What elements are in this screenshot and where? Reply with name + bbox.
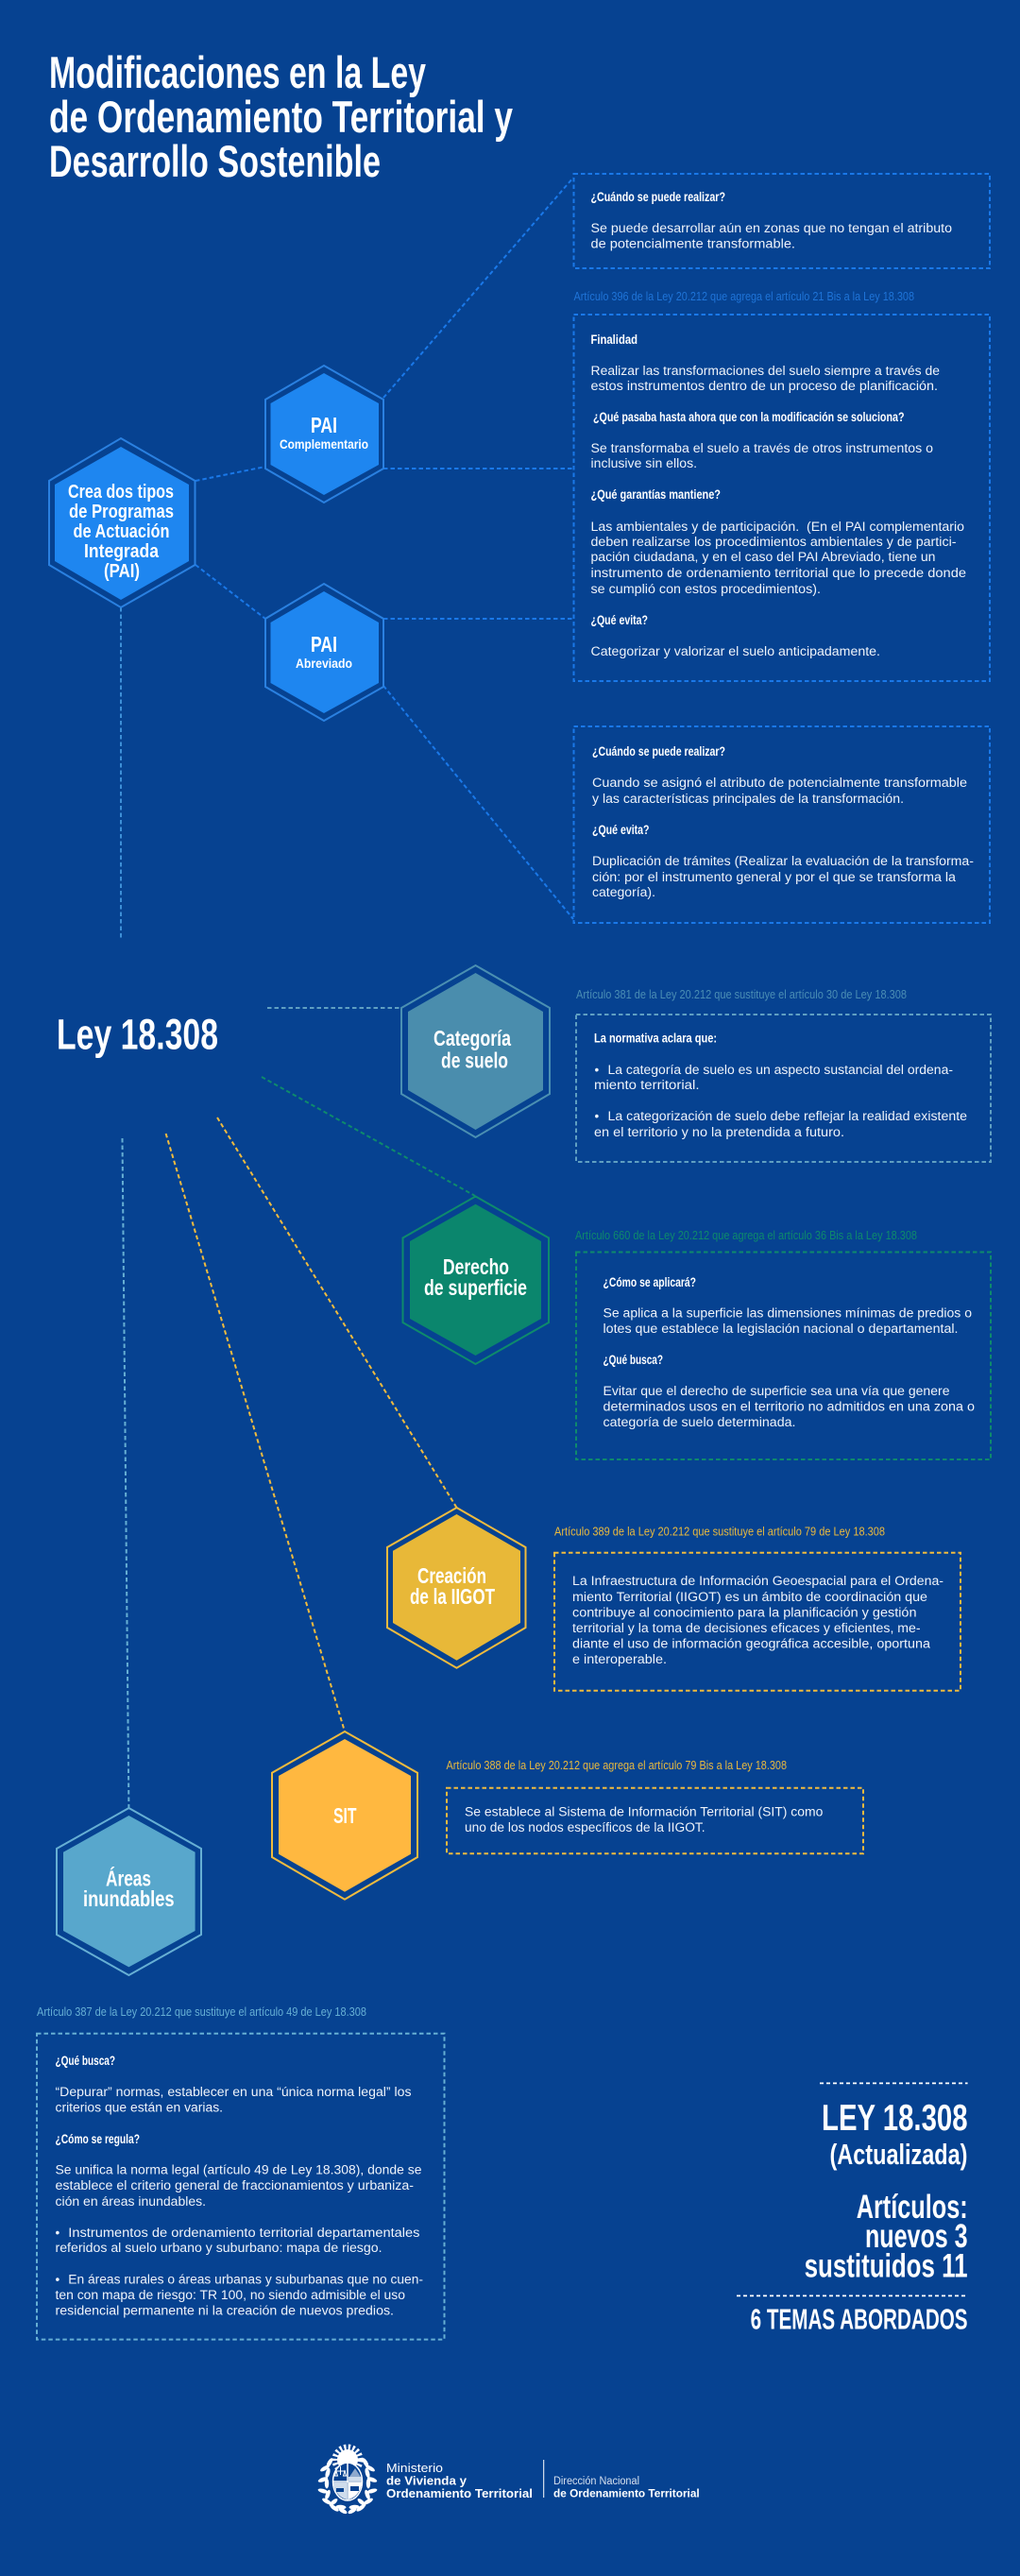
panel: finalidad: Finalidad bbox=[591, 333, 638, 347]
panel: áreas inundables: establece el criterio general de fraccionamientos y urbaniza- bbox=[55, 2178, 414, 2192]
hexagon: crea dos tipos de PAI: Crea dos tipos bbox=[68, 481, 174, 503]
panel: finalidad: instrumento de ordenamiento territorial que lo precede donde bbox=[591, 566, 966, 580]
hexagon: PAI complementario: PAI bbox=[311, 413, 337, 437]
hexagon: crea dos tipos de PAI: (PAI) bbox=[104, 560, 140, 582]
hexagon: áreas inundables bbox=[57, 1808, 201, 1975]
panel: áreas inundables: ten con mapa de riesgo: TR 100, no siendo admisible el uso bbox=[55, 2288, 405, 2302]
hexagon: PAI abreviado: PAI bbox=[311, 632, 337, 657]
logo text: ministerio: Ordenamiento Territorial bbox=[386, 2487, 533, 2500]
panel: áreas inundables: ción en áreas inundables. bbox=[55, 2194, 206, 2209]
panel: derecho de superficie: lotes que establece la legislación nacional o departamental. bbox=[603, 1322, 958, 1336]
panel: derecho de superficie: categoría de suelo determinada. bbox=[603, 1415, 795, 1429]
panel: categoría de suelo bbox=[576, 1015, 991, 1162]
panel: IIGOT: diante el uso de información geográfica accesible, oportuna bbox=[572, 1637, 931, 1651]
panel: PAI complementario conditions: de potencialmente transformable. bbox=[591, 236, 795, 251]
article reference 389: Artículo 389 de la Ley 20.212 que sustituye el artículo 79 de Ley 18.308 bbox=[554, 1526, 885, 1539]
panel: IIGOT bbox=[554, 1553, 960, 1691]
panel: áreas inundables: En áreas rurales o áreas urbanas y suburbanas que no cuen- bbox=[68, 2273, 423, 2286]
panel: IIGOT: contribuye al conocimiento para la planificación y gestión bbox=[572, 1606, 916, 1620]
connector: main hexagon to PAI abreviado bbox=[196, 565, 265, 619]
article reference 396: Artículo 396 de la Ley 20.212 que agrega el artículo 21 Bis a la Ley 18.308 bbox=[574, 290, 914, 303]
hexagon: crea dos tipos de PAI bbox=[49, 438, 195, 607]
article reference 387: Artículo 387 de la Ley 20.212 que sustituye el artículo 49 de Ley 18.308 bbox=[37, 2005, 366, 2019]
panel: finalidad: inclusive sin ellos. bbox=[591, 456, 697, 470]
panel: IIGOT: territorial y la toma de decisiones eficaces y eficientes, me- bbox=[572, 1621, 921, 1635]
hexagon: PAI abreviado bbox=[265, 584, 383, 721]
panel: áreas inundables: ¿Cómo se regula? bbox=[55, 2132, 140, 2146]
panel: áreas inundables bbox=[37, 2034, 444, 2340]
panel: derecho de superficie: Evitar que el derecho de superficie sea una vía que genere bbox=[603, 1384, 950, 1398]
panel: SIT: Se establece al Sistema de Información Territorial (SIT) como bbox=[465, 1805, 823, 1819]
summary block: (Actualizada) bbox=[829, 2138, 967, 2171]
panel: derecho de superficie: Se aplica a la superficie las dimensiones mínimas de predios o bbox=[603, 1306, 972, 1321]
hexagon: categoría de suelo: de suelo bbox=[441, 1049, 508, 1073]
connector: main hexagon to Ley 18.308 bbox=[120, 607, 122, 938]
panel: categoría de suelo: • bbox=[595, 1109, 599, 1123]
panel: derecho de superficie bbox=[576, 1253, 991, 1459]
panel: finalidad: se cumplió con estos procedimientos). bbox=[591, 582, 821, 596]
logo text: dirección nacional bbox=[553, 2476, 700, 2500]
hexagon: derecho de superficie: Derecho bbox=[443, 1254, 509, 1279]
panel: áreas inundables: • bbox=[55, 2226, 60, 2240]
logo text: ministerio bbox=[386, 2462, 533, 2500]
panel: PAI complementario conditions: ¿Cuándo se puede realizar? bbox=[591, 190, 725, 204]
panel: áreas inundables: “Depurar” normas, establecer en una “única norma legal” los bbox=[55, 2085, 412, 2099]
panel: PAI abreviado conditions: y las características principales de la transformación. bbox=[592, 792, 904, 806]
title bbox=[49, 47, 513, 186]
hexagon: áreas inundables: Áreas bbox=[106, 1866, 151, 1891]
panel: áreas inundables: criterios que están en varias. bbox=[55, 2101, 223, 2115]
panel: finalidad bbox=[574, 315, 990, 681]
hexagon: PAI abreviado: Abreviado bbox=[296, 656, 352, 671]
logo text: ministerio: Ministerio bbox=[386, 2462, 443, 2475]
panel: PAI abreviado conditions: ¿Qué evita? bbox=[592, 823, 650, 837]
panel: áreas inundables: residencial permanente ni la creación de nuevos predios. bbox=[55, 2304, 394, 2318]
panel: finalidad: ¿Qué evita? bbox=[591, 613, 648, 627]
hexagon: SIT bbox=[272, 1732, 417, 1900]
panel: finalidad: estos instrumentos dentro de un proceso de planificación. bbox=[591, 379, 938, 393]
connector: PAI abreviado to third box bbox=[383, 686, 573, 919]
title: de Ordenamiento Territorial y bbox=[49, 92, 513, 142]
logo text: dirección nacional: Dirección Nacional bbox=[553, 2476, 639, 2487]
hexagon: SIT: SIT bbox=[333, 1803, 357, 1828]
panel: SIT bbox=[447, 1788, 863, 1853]
panel: derecho de superficie: ¿Cómo se aplicará? bbox=[603, 1275, 696, 1289]
connector: PAI abreviado to finalidad box bbox=[383, 618, 573, 620]
panel: finalidad: pación ciudadana, y en el caso del PAI Abreviado, tiene un bbox=[591, 550, 935, 564]
connector: Ley to áreas inundables bbox=[123, 1138, 128, 1808]
hexagon: creación de la IIGOT: de la IIGOT bbox=[410, 1584, 495, 1609]
hexagon: categoría de suelo bbox=[401, 965, 550, 1137]
hexagon: áreas inundables: inundables bbox=[83, 1886, 175, 1911]
panel: finalidad: ¿Qué pasaba hasta ahora que con la modificación se soluciona? bbox=[593, 410, 905, 424]
connector: Ley to SIT bbox=[166, 1134, 345, 1732]
hexagon: crea dos tipos de PAI: de Programas bbox=[69, 501, 174, 522]
title: Modificaciones en la Ley bbox=[49, 47, 426, 97]
hexagon: crea dos tipos de PAI: de Actuación bbox=[74, 520, 170, 542]
article reference 660: Artículo 660 de la Ley 20.212 que agrega el artículo 36 Bis a la Ley 18.308 bbox=[575, 1229, 917, 1242]
panel: derecho de superficie: ¿Qué busca? bbox=[603, 1353, 663, 1367]
hexagon: PAI complementario: Complementario bbox=[280, 436, 368, 452]
panel: PAI abreviado conditions: ción: por el instrumento general y por el que se transforma la bbox=[592, 870, 957, 884]
hexagon: crea dos tipos de PAI: Integrada bbox=[84, 540, 160, 562]
panel: IIGOT: La Infraestructura de Información Geoespacial para el Ordena- bbox=[572, 1574, 944, 1588]
summary block bbox=[737, 2083, 968, 2335]
panel: áreas inundables: Se unifica la norma legal (artículo 49 de Ley 18.308), donde se bbox=[55, 2163, 422, 2177]
panel: áreas inundables: • bbox=[55, 2273, 60, 2286]
hexagon: categoría de suelo: Categoría bbox=[434, 1026, 511, 1050]
hexagon: creación de la IIGOT: Creación bbox=[417, 1563, 486, 1588]
panel: categoría de suelo: miento territorial. bbox=[594, 1078, 699, 1092]
article reference 388: Artículo 388 de la Ley 20.212 que agrega el artículo 79 Bis a la Ley 18.308 bbox=[446, 1759, 787, 1772]
title: Desarrollo Sostenible bbox=[49, 136, 381, 186]
panel: finalidad: deben realizarse los procedimientos ambientales y de partici- bbox=[591, 535, 956, 549]
summary block: sustituidos 11 bbox=[805, 2248, 968, 2284]
logo text: dirección nacional: de Ordenamiento Territorial bbox=[553, 2489, 700, 2500]
connector: main hexagon to PAI complementario bbox=[196, 467, 265, 481]
panel: IIGOT: miento Territorial (IIGOT) es un ámbito de coordinación que bbox=[572, 1590, 927, 1604]
panel: PAI abreviado conditions: Cuando se asignó el atributo de potencialmente transformable bbox=[592, 776, 967, 790]
hexagon: derecho de superficie: de superficie bbox=[424, 1275, 527, 1300]
panel: PAI complementario conditions: Se puede desarrollar aún en zonas que no tengan el atributo bbox=[591, 221, 952, 235]
panel: áreas inundables: ¿Qué busca? bbox=[55, 2054, 115, 2068]
panel: PAI abreviado conditions bbox=[574, 726, 990, 923]
article reference 381: Artículo 381 de la Ley 20.212 que sustituye el artículo 30 de Ley 18.308 bbox=[576, 988, 907, 1001]
connector: PAI complementario to first box bbox=[383, 178, 573, 398]
connector: Ley to IIGOT bbox=[217, 1117, 457, 1508]
heading: Ley 18.308: Ley 18.308 bbox=[57, 1011, 218, 1058]
panel: áreas inundables: Instrumentos de ordenamiento territorial departamentales bbox=[68, 2226, 420, 2240]
panel: áreas inundables: referidos al suelo urbano y suburbano: mapa de riesgo. bbox=[55, 2241, 382, 2255]
summary block: Artículos: bbox=[857, 2189, 968, 2226]
summary block: nuevos 3 bbox=[865, 2218, 968, 2255]
panel: categoría de suelo: La normativa aclara que: bbox=[594, 1032, 717, 1045]
panel: finalidad: Se transformaba el suelo a través de otros instrumentos o bbox=[591, 441, 933, 455]
panel: categoría de suelo: en el territorio y no la pretendida a futuro. bbox=[594, 1125, 844, 1139]
panel: finalidad: Realizar las transformaciones del suelo siempre a través de bbox=[591, 364, 940, 378]
hexagon: PAI complementario bbox=[265, 366, 383, 503]
panel: SIT: uno de los nodos específicos de la IIGOT. bbox=[465, 1820, 706, 1834]
connector: Ley to categoría bbox=[267, 1007, 401, 1009]
icon: coat of arms of Uruguay bbox=[317, 2448, 378, 2515]
panel: categoría de suelo: • bbox=[595, 1063, 599, 1077]
panel: IIGOT: e interoperable. bbox=[572, 1652, 667, 1666]
summary block: LEY 18.308 bbox=[822, 2098, 968, 2139]
connector: PAI complementario to finalidad box bbox=[383, 468, 573, 469]
panel: PAI abreviado conditions: categoría). bbox=[592, 885, 655, 899]
panel: PAI abreviado conditions: Duplicación de trámites (Realizar la evaluación de la transforma- bbox=[592, 854, 974, 868]
panel: finalidad: ¿Qué garantías mantiene? bbox=[591, 487, 721, 502]
connector: Ley to derecho de superficie bbox=[262, 1077, 475, 1196]
panel: PAI complementario conditions bbox=[574, 174, 990, 268]
panel: derecho de superficie: determinados usos en el territorio no admitidos en una zona o bbox=[603, 1400, 975, 1414]
panel: categoría de suelo: La categoría de suelo es un aspecto sustancial del ordena- bbox=[608, 1063, 953, 1077]
panel: finalidad: Las ambientales y de participación. (En el PAI complementario bbox=[591, 520, 964, 534]
panel: finalidad: Categorizar y valorizar el suelo anticipadamente. bbox=[591, 644, 880, 658]
hexagon: creación de la IIGOT bbox=[387, 1508, 525, 1668]
logo text: ministerio: de Vivienda y bbox=[386, 2475, 467, 2488]
panel: PAI abreviado conditions: ¿Cuándo se puede realizar? bbox=[592, 744, 725, 759]
hexagon: derecho de superficie bbox=[402, 1196, 549, 1364]
panel: categoría de suelo: La categorización de suelo debe reflejar la realidad existente bbox=[608, 1109, 967, 1123]
